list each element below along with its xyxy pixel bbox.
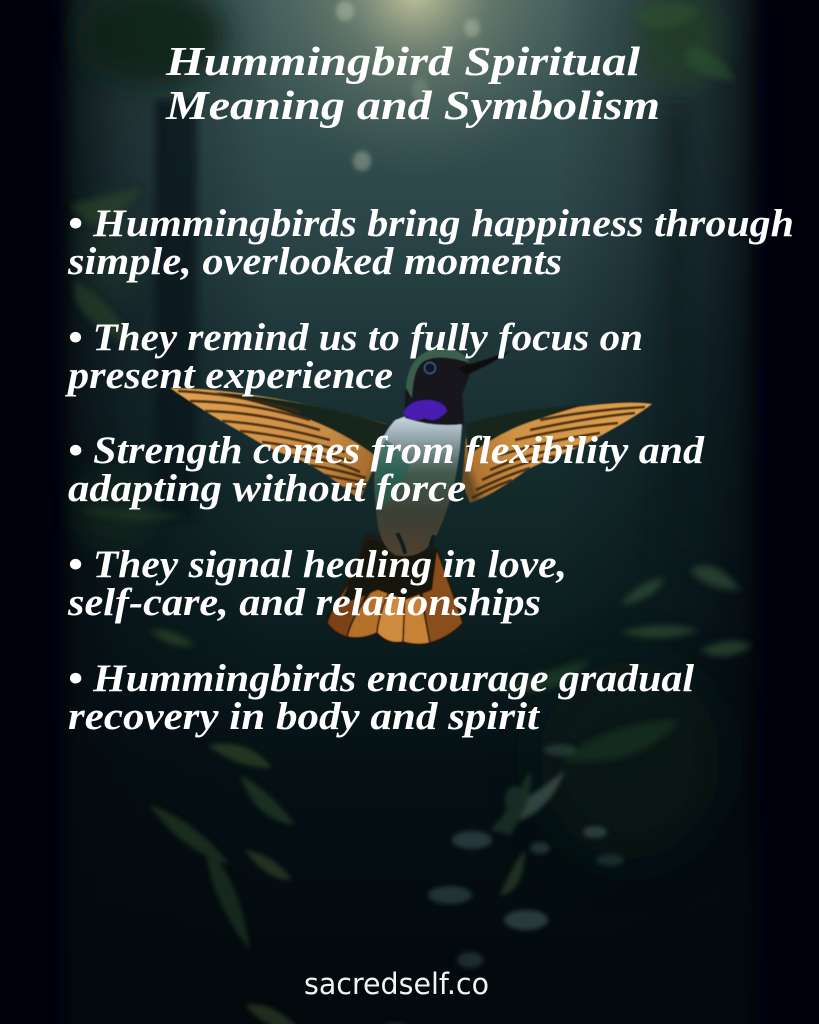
bullet 4: healing: self-care, and relationships	[67, 580, 541, 624]
right wing	[462, 403, 652, 503]
purple throat patch	[403, 400, 447, 420]
green crown	[406, 348, 470, 398]
tail feathers	[327, 533, 463, 644]
bullet 3: flexibility	[68, 428, 705, 510]
hummingbird	[170, 348, 652, 644]
head and throat	[405, 348, 472, 425]
bullet 3: flexibility: adapting without force	[68, 466, 466, 510]
bullet 2: present focus	[65, 315, 643, 397]
foliage: lower leaves	[150, 744, 624, 1024]
bullet 5: recovery: recovery in body and spirit	[68, 694, 540, 738]
bullet 4: healing: • They signal healing in love,	[68, 542, 567, 586]
bullet 2: present focus: • They remind us to fully focus on	[68, 315, 643, 359]
bullet 2: present focus: present experience	[65, 353, 393, 397]
left wing	[170, 388, 392, 500]
website footer: sacredself.co	[304, 967, 489, 1001]
body	[374, 414, 462, 556]
bullet 5: recovery	[68, 656, 694, 738]
bullet 4: healing	[67, 542, 567, 624]
beak	[458, 351, 511, 375]
bullet 1: happiness: • Hummingbirds bring happiness through	[68, 201, 794, 245]
bokeh light spots	[336, 1, 480, 171]
bullet 1: happiness	[67, 201, 794, 283]
bullet 1: happiness: simple, overlooked moments	[67, 239, 562, 283]
feet	[397, 533, 434, 556]
foliage: upper and side leaves	[70, 3, 752, 762]
title: Hummingbird Spiritual	[165, 38, 641, 84]
bullet 3: flexibility: • Strength comes from flexibility and	[68, 428, 705, 472]
eye	[424, 362, 436, 374]
bullet 5: recovery: • Hummingbirds encourage gradual	[68, 656, 694, 700]
title: Meaning and Symbolism	[165, 82, 660, 128]
title	[165, 38, 660, 128]
green flank and chest plumage	[376, 440, 410, 510]
